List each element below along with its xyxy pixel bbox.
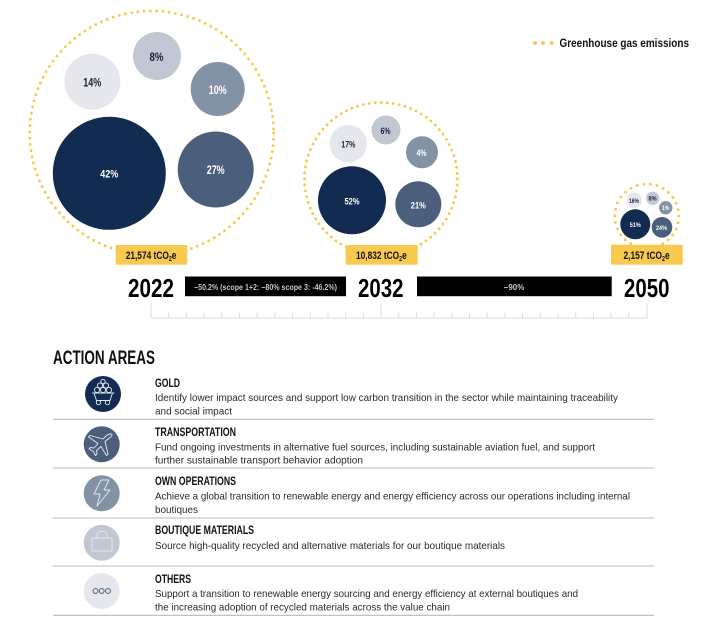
- emissions label: 2032: 10,832 tCO: [356, 250, 399, 262]
- emissions label: 2032: [346, 245, 418, 265]
- row: boutique materials: BOUTIQUE MATERIALS: [155, 523, 254, 537]
- year: 2050: 2050: [624, 273, 670, 303]
- bubble cluster: 2050: 1%: [662, 206, 670, 212]
- emissions label: 2050: [611, 245, 683, 265]
- bubble cluster: 2032: 6%: [380, 126, 391, 137]
- reduction bar: 2022 to 2032: −50.2% (scope 1+2: −80% scope 3: -46.2%): [194, 283, 337, 292]
- bubble cluster: 2050: 16%: [629, 198, 639, 205]
- bubble cluster: 2022: 8%: [150, 52, 164, 64]
- year: 2022: 2022: [128, 273, 174, 303]
- reduction bar: 2032 to 2050: −90%: [504, 283, 524, 292]
- legend: greenhouse gas emissions: Greenhouse gas emissions: [560, 38, 689, 50]
- row: own operations: [84, 474, 630, 516]
- bubble cluster: 2022: 27%: [207, 165, 225, 177]
- bubble cluster: 2022: 10%: [209, 85, 227, 97]
- row: others: the increasing adoption of recycled materials across the value chain: [155, 602, 450, 614]
- icon: three dots: [84, 573, 120, 609]
- bubble cluster: 2050: [615, 184, 679, 248]
- emissions label: 2050: 2,157 tCO: [624, 250, 662, 262]
- bubble cluster: 2032: 17%: [341, 140, 356, 150]
- bubble cluster: 2050: 51%: [630, 222, 641, 229]
- bubble cluster: 2032: 21%: [411, 200, 426, 212]
- icon: lightning bolt: [84, 475, 120, 511]
- row: gold: GOLD: [155, 376, 180, 390]
- emissions label: 2022: e: [172, 250, 177, 262]
- row: own operations: Achieve a global transition to renewable energy and energy efficiency across our operations including internal: [155, 490, 630, 502]
- heading: action areas: ACTION AREAS: [53, 348, 155, 369]
- row: transportation: further sustainable transport behavior adoption: [155, 454, 363, 466]
- row: others: Support a transition to renewable energy sourcing and energy efficiency at external boutiques and: [155, 588, 578, 600]
- emissions label: 2050: 2: [662, 255, 665, 263]
- emissions label: 2050: e: [665, 250, 670, 262]
- icon: shopping bag: [84, 525, 120, 561]
- icon: airplane: [84, 426, 120, 462]
- row: transportation: TRANSPORTATION: [155, 425, 236, 439]
- row: others: OTHERS: [155, 572, 191, 586]
- bubble cluster: 2032: 4%: [416, 148, 427, 159]
- bubble cluster: 2050: 8%: [648, 196, 657, 202]
- reduction bar: 2022 to 2032: [185, 276, 346, 296]
- row: own operations: boutiques: [155, 504, 198, 516]
- bubble cluster: 2022: 42%: [100, 168, 118, 180]
- emissions label: 2032: 2: [399, 255, 403, 263]
- timeline ruler: [151, 303, 647, 318]
- emissions label: 2032: e: [402, 250, 407, 262]
- row: boutique materials: Source high-quality recycled and alternative materials for our boutique materials: [155, 540, 505, 552]
- reduction bar: 2032 to 2050: [417, 276, 612, 296]
- year: 2032: 2032: [358, 273, 404, 303]
- row: gold: [85, 376, 619, 418]
- row: transportation: Fund ongoing investments in alternative fuel sources, including sustainable aviation fuel, and support: [155, 442, 595, 454]
- row: transportation: [84, 425, 595, 466]
- emissions label: 2022: 2: [169, 255, 172, 263]
- emissions label: 2022: [116, 245, 187, 265]
- icon: gold cart: [85, 376, 121, 412]
- bubble cluster: 2022: 14%: [83, 78, 101, 90]
- bubble cluster: 2032: 52%: [344, 196, 360, 208]
- row: own operations: OWN OPERATIONS: [155, 474, 236, 488]
- bubble cluster: 2022: [30, 11, 274, 255]
- row: gold: and social impact: [155, 406, 232, 418]
- row: gold: Identify lower impact sources and support low carbon transition in the sector while maintaining traceability: [155, 392, 619, 404]
- row: boutique materials: [84, 523, 505, 561]
- bubble cluster: 2032: [304, 102, 458, 256]
- emissions label: 2022: 21,574 tCO: [126, 250, 169, 262]
- bubble cluster: 2050: 24%: [656, 225, 667, 232]
- row: others: [84, 572, 578, 614]
